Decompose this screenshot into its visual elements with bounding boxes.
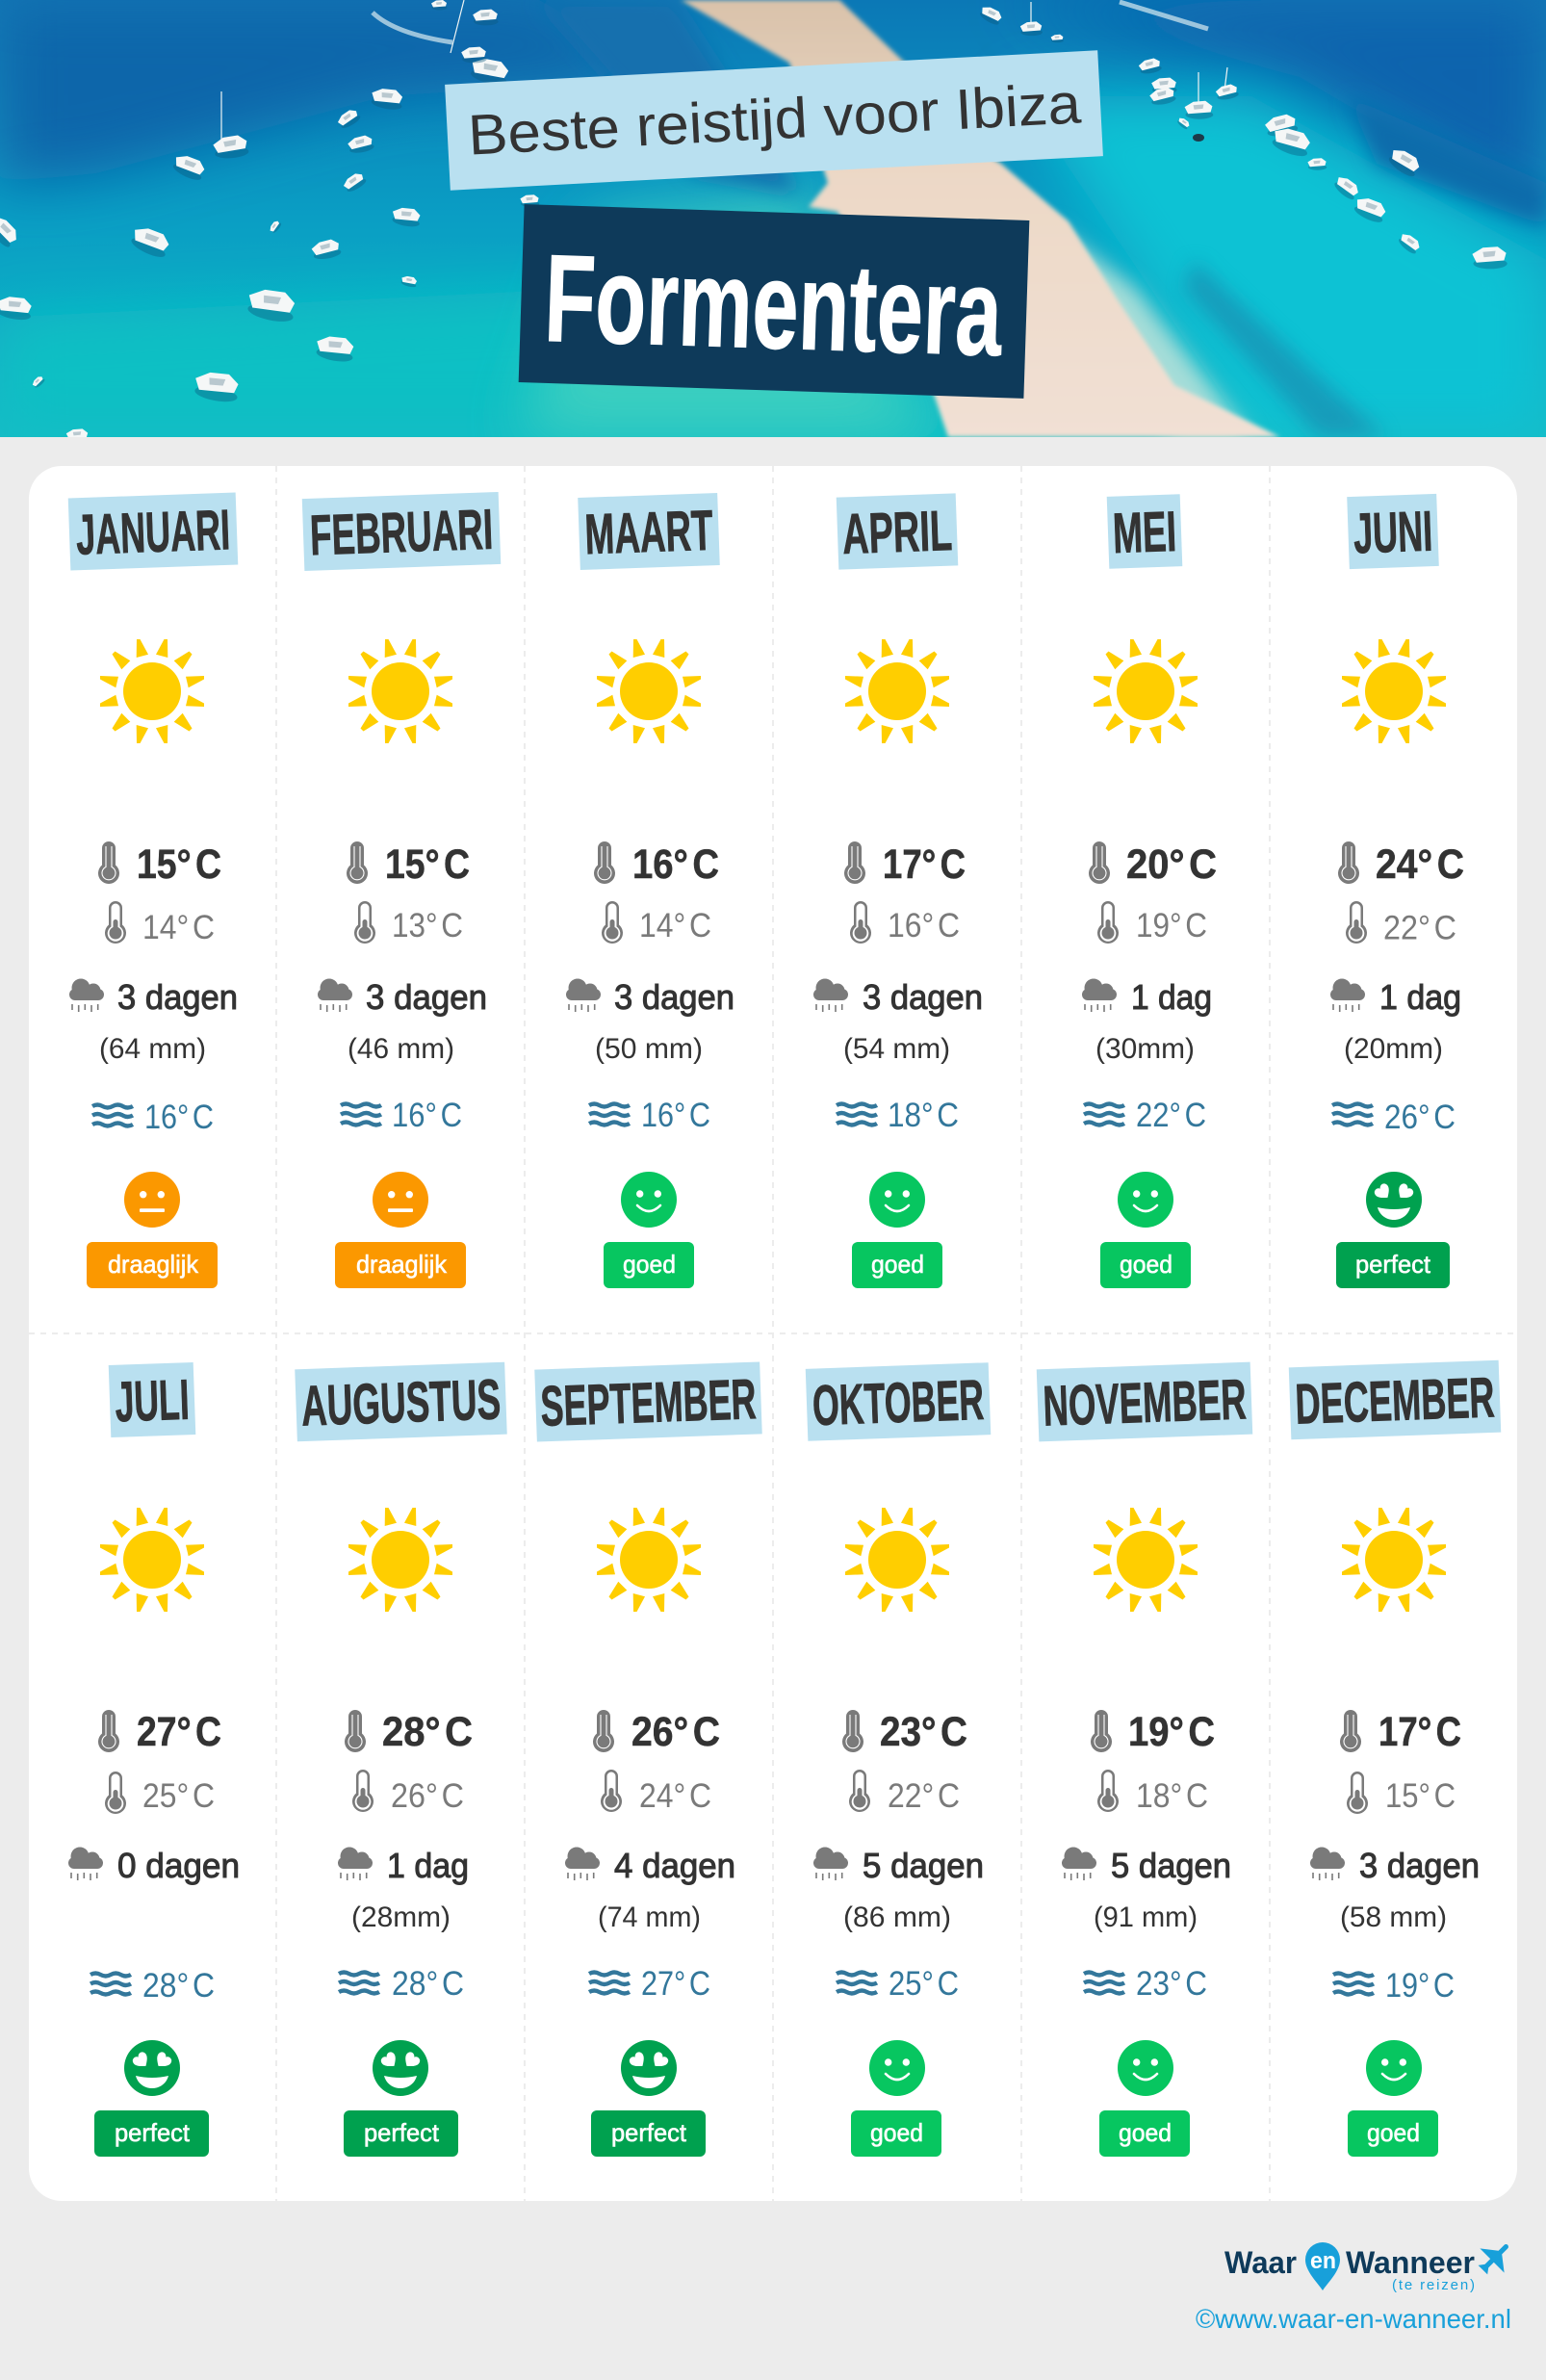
max temperature: 20° C: [1126, 841, 1217, 888]
icon: sun: [1094, 1508, 1198, 1612]
max temperature: 19° C: [1128, 1709, 1215, 1755]
icon: sun: [1342, 639, 1446, 743]
min temperature: [105, 901, 215, 946]
cell: januari: [68, 492, 238, 1288]
cell: december: [1289, 1360, 1501, 2157]
rainfall: 3 dagen: [863, 977, 983, 1017]
month label: augustus: [295, 1362, 507, 1441]
max temperature: 17° C: [883, 841, 966, 888]
icon: sun: [100, 1508, 204, 1612]
rating: goed: goed: [871, 1250, 924, 1279]
month label: november: NOVEMBER: [1042, 1367, 1248, 1438]
rating: goed: goed: [1367, 2118, 1420, 2147]
rainfall: (30mm): [1095, 1033, 1195, 1065]
sea temperature: 23° C: [1136, 1965, 1207, 2003]
rainfall: (50 mm): [595, 1033, 703, 1065]
max temperature: 15° C: [137, 841, 221, 888]
rating: perfect: [1336, 1172, 1450, 1288]
min temperature: 18° C: [1136, 1777, 1208, 1815]
min temperature: 19° C: [1136, 907, 1207, 944]
rainfall: [1082, 977, 1212, 1065]
rating: perfect: [591, 2040, 706, 2157]
rainfall: 3 dagen: [366, 977, 487, 1017]
rainfall: (58 mm): [1340, 1901, 1447, 1933]
sea temperature: [339, 1965, 464, 2003]
rating: perfect: perfect: [115, 2118, 191, 2147]
icon: sun: [348, 639, 452, 743]
rainfall: 5 dagen: [1111, 1846, 1231, 1885]
rainfall: [565, 1846, 735, 1933]
sea temperature: [837, 1097, 959, 1134]
month label: augustus: AUGUSTUS: [300, 1367, 502, 1438]
rating: goed: [852, 1172, 942, 1288]
rainfall: (54 mm): [843, 1033, 950, 1065]
month label: januari: JANUARI: [75, 498, 231, 567]
title banner: Formentera: [519, 204, 1029, 399]
max temperature: 16° C: [632, 841, 719, 888]
rainfall: (46 mm): [348, 1033, 454, 1065]
subtitle banner: Beste reistijd voor Ibiza: [445, 50, 1103, 191]
rating: goed: [1348, 2040, 1438, 2157]
min temperature: [602, 901, 711, 944]
month label: juni: [1347, 494, 1439, 569]
month label: oktober: [806, 1362, 991, 1441]
icon: sun: [1094, 639, 1198, 743]
cell: februari: [302, 492, 501, 1288]
rating: goed: goed: [623, 1250, 676, 1279]
rating: perfect: perfect: [364, 2118, 440, 2147]
min temperature: 25° C: [142, 1777, 215, 1815]
month label: april: [837, 493, 958, 570]
rainfall: 3 dagen: [1359, 1846, 1480, 1885]
min temperature: [1097, 1770, 1208, 1815]
rainfall: 0 dagen: [117, 1846, 240, 1885]
icon: sun: [845, 639, 949, 743]
month label: november: [1037, 1362, 1252, 1441]
max temperature: 17° C: [1379, 1709, 1461, 1755]
sea temperature: [589, 1965, 710, 2003]
sea temperature: [837, 1965, 959, 2003]
rainfall: 1 dag: [1131, 977, 1212, 1017]
rating: perfect: perfect: [1355, 1250, 1431, 1279]
max temperature: [594, 841, 719, 888]
max temperature: [1091, 1709, 1215, 1755]
min temperature: 22° C: [888, 1777, 960, 1815]
month label: mei: MEI: [1112, 500, 1177, 565]
sea temperature: [1084, 1965, 1207, 2003]
sea temperature: 27° C: [641, 1965, 710, 2003]
rainfall: 1 dag: [387, 1846, 469, 1885]
sea temperature: [92, 1099, 214, 1136]
sea temperature: [90, 1967, 215, 2005]
max temperature: [98, 1709, 221, 1755]
month label: februari: FEBRUARI: [309, 498, 494, 567]
month label: maart: MAART: [583, 499, 714, 566]
max temperature: [842, 1709, 967, 1755]
sea temperature: 28° C: [142, 1967, 215, 2005]
month label: april: APRIL: [841, 499, 953, 566]
month label: oktober: OKTOBER: [812, 1368, 985, 1437]
month label: mei: [1107, 494, 1182, 569]
rainfall: [338, 1846, 469, 1933]
min temperature: [1346, 901, 1456, 947]
min temperature: 22° C: [1383, 909, 1456, 947]
month label: juli: [109, 1362, 195, 1437]
month label: juli: JULI: [114, 1368, 191, 1434]
sea temperature: [341, 1097, 462, 1134]
rating: perfect: [94, 2040, 209, 2157]
month label: juni: JUNI: [1353, 500, 1433, 565]
cell: mei: [1082, 494, 1217, 1288]
sea temperature: 25° C: [889, 1965, 959, 2003]
rainfall: 4 dagen: [614, 1846, 735, 1885]
rainfall: 1 dag: [1379, 977, 1461, 1017]
month label: januari: [68, 492, 238, 571]
icon: sun: [1342, 1508, 1446, 1612]
sea temperature: 19° C: [1385, 1967, 1455, 2005]
rainfall: [1310, 1846, 1480, 1933]
sea temperature: 26° C: [1384, 1099, 1456, 1136]
month label: maart: [578, 493, 720, 570]
month label: september: SEPTEMBER: [539, 1367, 758, 1438]
sea temperature: 16° C: [144, 1099, 214, 1136]
rating: goed: goed: [1120, 1250, 1172, 1279]
max temperature: 27° C: [137, 1709, 221, 1755]
logo: Waar en Wanneer: [1224, 2233, 1520, 2293]
max temperature: 15° C: [385, 841, 470, 888]
max temperature: [1338, 841, 1464, 888]
logo: Waar en Wanneer: Waar: [1224, 2245, 1297, 2280]
rainfall: [1330, 977, 1461, 1065]
rainfall: 5 dagen: [863, 1846, 984, 1885]
rainfall: [69, 977, 238, 1065]
max temperature: 26° C: [631, 1709, 720, 1755]
rainfall: [813, 977, 983, 1065]
rating: draaglijk: [335, 1172, 466, 1288]
sea temperature: 22° C: [1136, 1097, 1206, 1134]
rainfall: [1062, 1846, 1231, 1933]
cell: juli: [68, 1362, 240, 2157]
sea temperature: 16° C: [641, 1097, 710, 1134]
sea temperature: [1084, 1097, 1206, 1134]
min temperature: 16° C: [888, 907, 960, 944]
sea temperature: 16° C: [392, 1097, 462, 1134]
cell: juni: [1330, 494, 1464, 1288]
sea temperature: [1332, 1099, 1456, 1136]
subtitle banner: Beste reistijd voor Ibiza: Beste reistijd voor Ibiza: [467, 71, 1082, 168]
logo: Waar en Wanneer: (te reizen): [1392, 2277, 1475, 2293]
min temperature: [850, 901, 960, 944]
icon: sun: [597, 1508, 701, 1612]
rating: goed: [604, 1172, 694, 1288]
rating: perfect: perfect: [611, 2118, 687, 2147]
rating: draaglijk: [87, 1172, 218, 1288]
panel: monthly climate table: [29, 466, 1517, 2201]
icon: sun: [597, 639, 701, 743]
max temperature: [347, 841, 470, 888]
min temperature: [601, 1770, 711, 1815]
rating: draaglijk: draaglijk: [356, 1250, 448, 1279]
cell: september: [534, 1361, 762, 2157]
cell: oktober: [806, 1362, 991, 2157]
min temperature: 13° C: [392, 907, 463, 944]
rainfall: 3 dagen: [614, 977, 734, 1017]
rating: goed: [1099, 2040, 1190, 2157]
sea temperature: 28° C: [392, 1965, 464, 2003]
rating: goed: goed: [1119, 2118, 1172, 2147]
icon: sun: [348, 1508, 452, 1612]
max temperature: 28° C: [382, 1709, 473, 1755]
cell: november: [1037, 1362, 1252, 2157]
min temperature: [1347, 1772, 1456, 1815]
max temperature: [1089, 841, 1217, 888]
website credit: ©www.waar-en-wanneer.nl: [1196, 2304, 1511, 2334]
rainfall: (91 mm): [1094, 1901, 1198, 1933]
rainfall: (28mm): [351, 1901, 451, 1933]
max temperature: 23° C: [880, 1709, 967, 1755]
rating: goed: [1100, 1172, 1191, 1288]
min temperature: [849, 1770, 960, 1815]
header photo: aerial view of Formentera beach and boats: [0, 0, 1546, 443]
logo: Waar en Wanneer: Wanneer: [1346, 2245, 1475, 2280]
icon: airplane: [1471, 2233, 1520, 2282]
rainfall: [318, 977, 487, 1065]
rainfall: 3 dagen: [117, 977, 238, 1017]
max temperature: [98, 841, 221, 888]
rating: goed: goed: [870, 2118, 923, 2147]
cell: augustus: [295, 1362, 507, 2157]
sea temperature: [1333, 1967, 1455, 2005]
cell: april: [813, 493, 983, 1288]
min temperature: [352, 1770, 464, 1815]
min temperature: [1097, 901, 1207, 944]
max temperature: 24° C: [1376, 841, 1464, 888]
max temperature: [593, 1709, 720, 1755]
rating: perfect: [344, 2040, 458, 2157]
rating: draaglijk: draaglijk: [108, 1250, 199, 1279]
min temperature: 14° C: [142, 909, 215, 946]
min temperature: 24° C: [639, 1777, 711, 1815]
max temperature: [1340, 1709, 1461, 1755]
title banner: Formentera: Formentera: [543, 229, 1005, 382]
min temperature: 26° C: [391, 1777, 464, 1815]
min temperature: [354, 901, 463, 944]
logo: Waar en Wanneer: en: [1310, 2248, 1336, 2274]
sea temperature: 18° C: [888, 1097, 959, 1134]
rating: goed: [851, 2040, 941, 2157]
cell: maart: [566, 493, 734, 1288]
rainfall: (20mm): [1344, 1033, 1443, 1065]
month label: februari: [302, 492, 501, 571]
rainfall: [813, 1846, 984, 1933]
max temperature: [345, 1709, 473, 1755]
min temperature: 15° C: [1385, 1777, 1456, 1815]
max temperature: [844, 841, 966, 888]
icon: sun: [100, 639, 204, 743]
rainfall: (74 mm): [598, 1901, 701, 1933]
icon: sun: [845, 1508, 949, 1612]
rainfall: (64 mm): [99, 1033, 206, 1065]
month label: september: [534, 1361, 762, 1442]
min temperature: [105, 1772, 215, 1815]
rainfall: (86 mm): [843, 1901, 951, 1933]
sea temperature: [589, 1097, 710, 1134]
icon: map pin: [1305, 2242, 1340, 2290]
rainfall: [566, 977, 734, 1065]
min temperature: 14° C: [639, 907, 711, 944]
